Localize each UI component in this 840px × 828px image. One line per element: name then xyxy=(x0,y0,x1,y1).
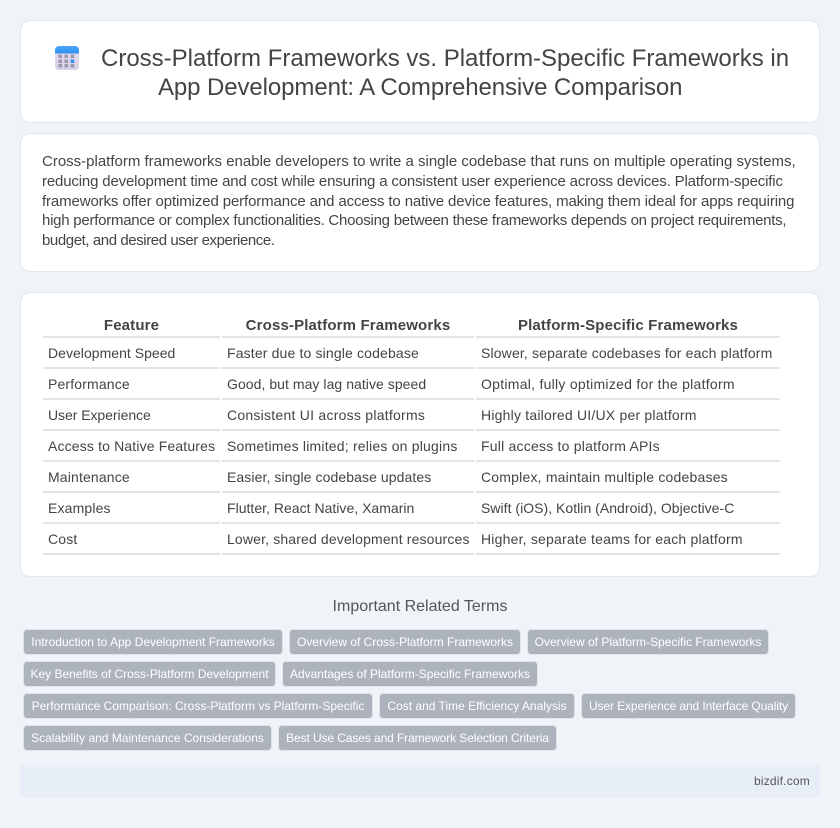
row: maintenance xyxy=(48,469,728,485)
table header: Feature xyxy=(104,317,159,334)
title xyxy=(101,45,789,101)
tag xyxy=(23,629,283,655)
tag xyxy=(23,693,373,719)
title: Cross-Platform Frameworks vs. Platform-Specific Frameworks in xyxy=(101,45,789,72)
row: development speed: Slower, separate codebases for each platform xyxy=(481,345,772,361)
intro text: reducing development time and cost while ensuring a consistent user experience across devices. Platform-specific xyxy=(42,173,783,190)
row: development speed: Faster due to single codebase xyxy=(227,345,419,361)
row: user experience: User Experience xyxy=(48,407,151,423)
tag: Introduction to App Development Frameworks xyxy=(31,635,275,649)
table header: Platform-Specific Frameworks xyxy=(518,317,738,334)
table xyxy=(43,317,780,555)
row: native features: Access to Native Features xyxy=(48,438,215,454)
tag xyxy=(23,661,276,687)
row: maintenance: Easier, single codebase updates xyxy=(227,469,431,485)
row: development speed xyxy=(48,345,772,361)
row: examples xyxy=(48,500,734,516)
row: examples: Examples xyxy=(48,500,111,516)
tag xyxy=(278,725,557,751)
tags: related terms xyxy=(23,629,796,751)
tag: Advantages of Platform-Specific Frameworks xyxy=(290,667,530,681)
row: native features: Full access to platform APIs xyxy=(481,438,660,454)
row: performance: Optimal, fully optimized for the platform xyxy=(481,376,735,392)
row: examples: Flutter, React Native, Xamarin xyxy=(227,500,414,516)
footer text: bizdif.com xyxy=(754,774,810,788)
title: App Development: A Comprehensive Comparison xyxy=(158,74,682,101)
row: performance xyxy=(48,376,735,392)
row: cost: Lower, shared development resources xyxy=(227,531,470,547)
row: development speed: Development Speed xyxy=(48,345,175,361)
icon: calendar app grid xyxy=(55,46,79,70)
row: performance: Performance xyxy=(48,376,130,392)
tag xyxy=(289,629,521,655)
row: maintenance: Maintenance xyxy=(48,469,130,485)
tag: Best Use Cases and Framework Selection Criteria xyxy=(286,731,549,745)
tag xyxy=(23,725,272,751)
tag: Performance Comparison: Cross-Platform vs Platform-Specific xyxy=(32,699,364,713)
panel: comparison table xyxy=(20,292,820,577)
tag: User Experience and Interface Quality xyxy=(589,699,788,713)
row: user experience: Consistent UI across platforms xyxy=(227,407,425,423)
footer bar xyxy=(20,765,820,798)
row: examples: Swift (iOS), Kotlin (Android), Objective-C xyxy=(481,500,734,516)
tag: Scalability and Maintenance Considerations xyxy=(31,731,264,745)
row: cost xyxy=(48,531,743,547)
tag xyxy=(282,661,538,687)
tag xyxy=(527,629,769,655)
tag: Overview of Cross-Platform Frameworks xyxy=(297,635,513,649)
intro text: budget, and desired user experience. xyxy=(42,232,275,249)
tag: Key Benefits of Cross-Platform Development xyxy=(30,667,269,681)
row: user experience xyxy=(48,407,697,423)
row: cost: Higher, separate teams for each platform xyxy=(481,531,743,547)
row: native features: Sometimes limited; relies on plugins xyxy=(227,438,458,454)
intro text: Cross-platform frameworks enable developers to write a single codebase that runs on multiple operating systems, xyxy=(42,153,796,170)
panel: intro xyxy=(20,133,820,272)
row: cost: Cost xyxy=(48,531,77,547)
row: user experience: Highly tailored UI/UX per platform xyxy=(481,407,697,423)
row: maintenance: Complex, maintain multiple codebases xyxy=(481,469,728,485)
row: native features xyxy=(48,438,660,454)
row: performance: Good, but may lag native speed xyxy=(227,376,426,392)
tag xyxy=(581,693,796,719)
tag: Overview of Platform-Specific Frameworks xyxy=(535,635,761,649)
table header xyxy=(104,317,738,334)
tag xyxy=(379,693,575,719)
intro text: frameworks offer optimized performance and access to native device features, making them ideal for apps requiring xyxy=(42,193,794,210)
table header: Cross-Platform Frameworks xyxy=(246,317,450,334)
intro text xyxy=(42,153,796,249)
related terms heading: Important Related Terms xyxy=(333,598,507,615)
intro text: high performance or complex functionalities. Choosing between these frameworks depends on project requirements, xyxy=(42,212,786,229)
tag: Cost and Time Efficiency Analysis xyxy=(387,699,567,713)
header panel xyxy=(20,20,820,123)
